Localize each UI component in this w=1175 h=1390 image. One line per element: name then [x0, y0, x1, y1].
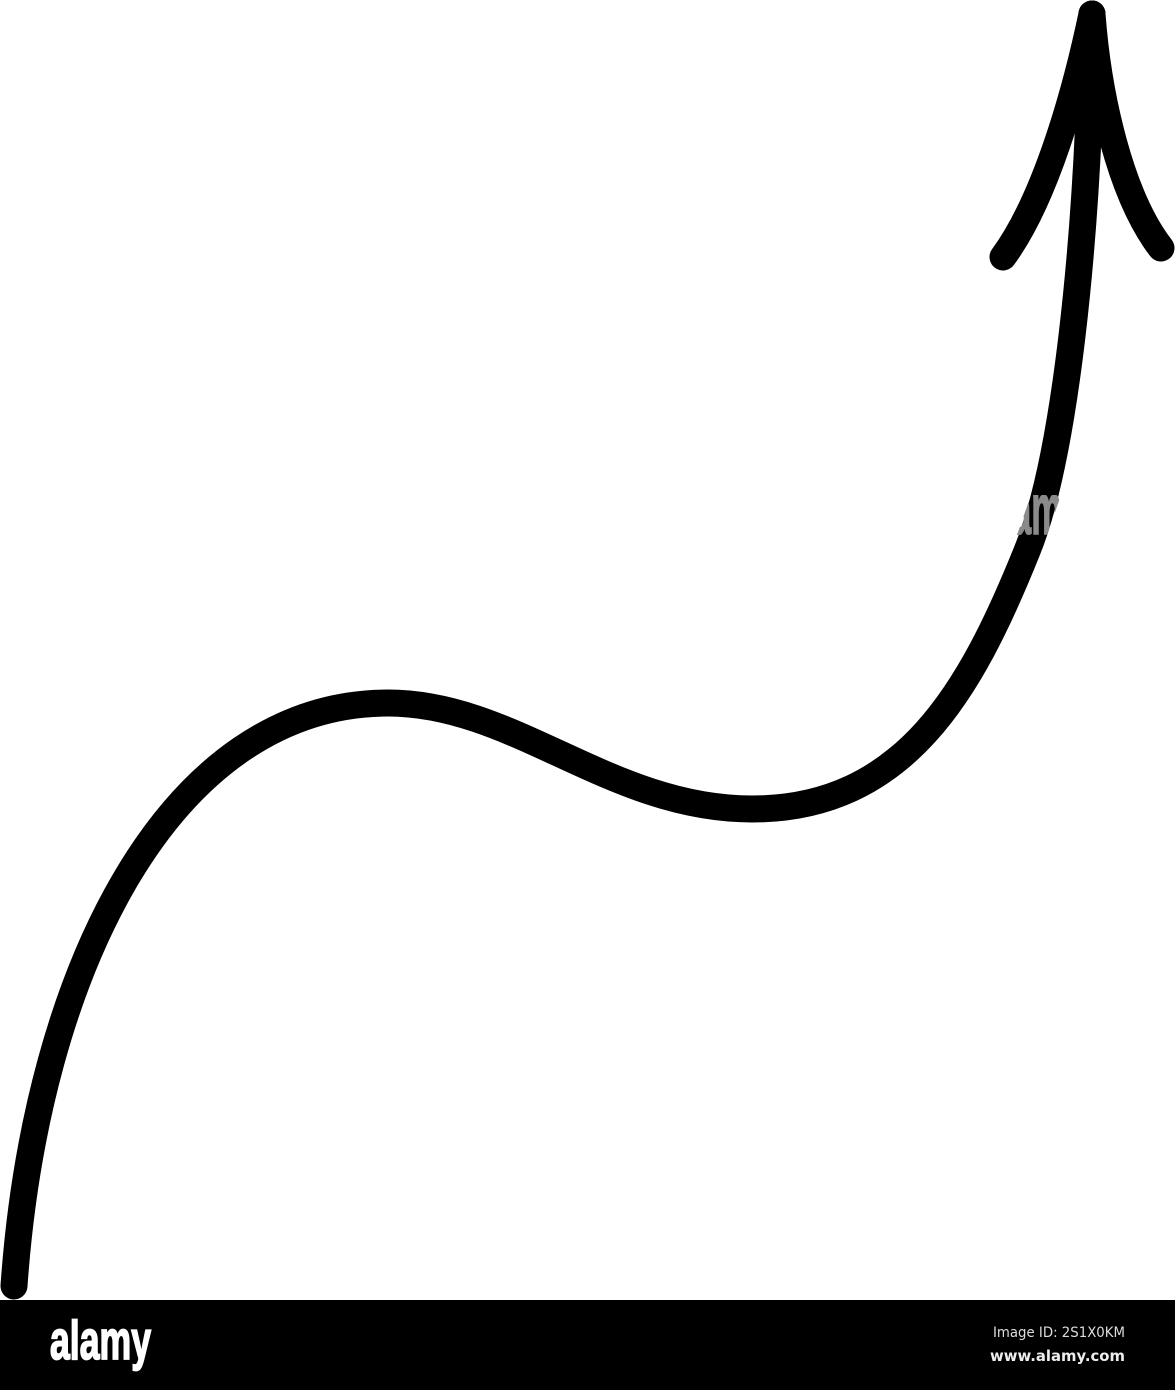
text: am — [1012, 470, 1062, 550]
website: www.alamy.com — [990, 1347, 1125, 1365]
arrowhead left barb — [1003, 14, 1092, 257]
image ID: Image ID: 2S1X0KM — [993, 1325, 1125, 1341]
alamy logo: alamy — [50, 1309, 151, 1371]
arrowhead right barb — [1092, 14, 1161, 248]
footer bar — [0, 1300, 1175, 1390]
